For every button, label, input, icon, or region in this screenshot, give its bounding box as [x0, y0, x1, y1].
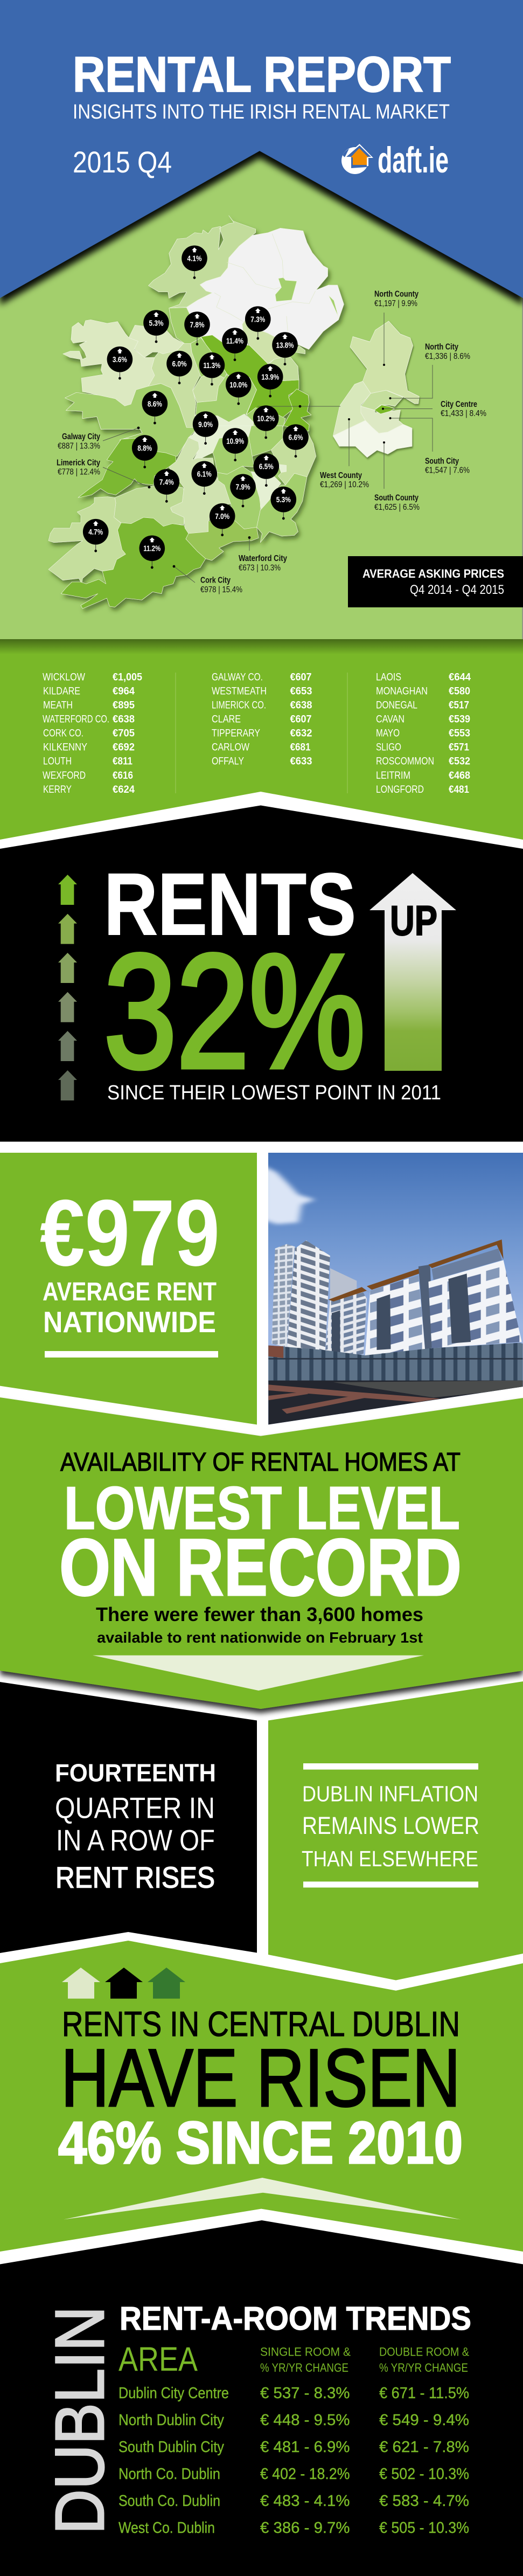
county badge: 10.9% [222, 428, 248, 461]
table column: double room prices [379, 2385, 469, 2537]
county badge: 10.2% [253, 405, 279, 439]
county badge: 13.8%: 13.8% [276, 341, 294, 350]
county names column 1: LOUTH [43, 755, 72, 767]
county names column 2: CLARE [212, 713, 241, 725]
text block: homes available: available to rent nationwide on February 1st [97, 1629, 423, 1646]
panel: blue header [0, 0, 523, 298]
leader lines: dublin inset [257, 313, 433, 489]
map: southern counties [48, 426, 316, 608]
county badge: 7.4%: 7.4% [159, 478, 174, 487]
county prices column 2: €633 [290, 755, 312, 767]
county badge: 7.0% [210, 503, 235, 536]
label: Cork City [173, 565, 242, 594]
county badge: 11.4% [222, 328, 248, 361]
table column: double room prices: € 621 - 7.8% [379, 2439, 469, 2456]
panel: availability [0, 1397, 523, 1709]
callout: average asking prices: AVERAGE ASKING PRICES [362, 567, 504, 580]
panel: central dublin [0, 1941, 523, 2252]
panel: ireland map [48, 216, 344, 608]
text: dublin inflation: REMAINS LOWER [302, 1812, 479, 1839]
county prices column 3: €468 [449, 770, 470, 781]
label: Cork City: Cork City [200, 576, 231, 585]
county names column 1: CORK CO. [43, 727, 83, 739]
label: South City: South City [425, 457, 459, 466]
county names column 2: WESTMEATH [212, 685, 267, 697]
icon: small arrow stack [58, 875, 77, 1100]
county names column 1: WICKLOW [43, 671, 85, 683]
map: northern counties [63, 216, 344, 460]
county badge: 6.6%: 6.6% [289, 433, 303, 442]
table column: areas: North Dublin City [118, 2412, 224, 2429]
county badge: 9.0% [193, 411, 218, 445]
label: Waterford City: €673 | 10.3% [239, 564, 281, 573]
callout: average asking prices [348, 556, 523, 607]
county badge: 6.0%: 6.0% [172, 360, 187, 369]
county badge: 10.2%: 10.2% [257, 414, 275, 423]
county badge: 11.3%: 11.3% [203, 362, 220, 370]
heading: lowest level: LOWEST LEVEL [64, 1474, 460, 1542]
panel: dublin inflation [268, 1681, 523, 1980]
county prices column 1: €705 [113, 727, 135, 739]
county badge: 4.1% [182, 246, 207, 279]
county prices column 2: €632 [290, 727, 312, 739]
county badge: 10.0% [226, 372, 252, 405]
county prices column 1: €692 [113, 741, 135, 753]
table column: areas: Dublin City Centre [118, 2385, 229, 2402]
label: West County: West County [320, 471, 362, 480]
county prices column 3 [449, 671, 471, 795]
county badge: 7.8%: 7.8% [190, 321, 205, 329]
county names column 3: MONAGHAN [376, 685, 428, 697]
county badge: 9.0%: 9.0% [198, 420, 213, 429]
table header: single room: % YR/YR CHANGE [260, 2361, 348, 2374]
county names column 3 [376, 671, 434, 795]
heading: rents: RENTS [104, 855, 356, 953]
label: South County [374, 494, 420, 512]
table header: area: AREA [118, 2340, 198, 2378]
county names column 2: CARLOW [212, 741, 249, 753]
table column: double room prices: € 583 - 4.7% [379, 2492, 469, 2510]
county names column 2 [212, 671, 267, 767]
county names column 3: LEITRIM [376, 770, 410, 781]
county badge: 10.9%: 10.9% [226, 437, 244, 446]
county badge: 4.7% [83, 519, 109, 552]
county badge: 5.3% south [270, 487, 296, 520]
county badge: 13.9% [257, 364, 283, 397]
panel: fourteenth quarter [0, 1682, 257, 1953]
label: Galway City: Galway City [62, 432, 100, 441]
table header: single room: SINGLE ROOM & [260, 2345, 351, 2358]
county badge: 5.3% [143, 310, 169, 343]
panel: county price list [0, 639, 523, 855]
county prices column 3: €481 [449, 784, 469, 795]
county badge: 4.1%: 4.1% [187, 255, 202, 264]
county names column 1: KERRY [43, 784, 72, 795]
text: dublin inflation [302, 1782, 479, 1871]
label: North City: €1,336 | 8.6% [425, 352, 470, 361]
table column: double room prices: € 671 - 11.5% [379, 2385, 469, 2402]
label: South County: South County [374, 494, 419, 502]
county names column 1: KILDARE [43, 685, 80, 697]
county names column 2: OFFALY [212, 755, 244, 767]
text: quarter in: QUARTER IN [55, 1791, 215, 1825]
logo: daft.ie: daft.ie [378, 140, 449, 181]
county badge: 8.8%: 8.8% [137, 444, 152, 453]
county badge: 3.6% [107, 347, 133, 379]
table column: double room prices: € 549 - 9.4% [379, 2412, 469, 2429]
county badge: 3.6%: 3.6% [113, 356, 127, 364]
label: City Centre [441, 400, 486, 418]
county names column 2: TIPPERARY [212, 727, 260, 739]
county prices column 2: €681 [290, 741, 311, 753]
county badge: 11.2%: 11.2% [143, 545, 161, 553]
text: dublin inflation: THAN ELSEWHERE [302, 1846, 478, 1871]
text: rent rises: RENT RISES [55, 1860, 215, 1894]
county badge: 7.3% [245, 306, 271, 340]
table column: double room prices: € 502 - 10.3% [379, 2466, 469, 2483]
county prices column 3: €644 [449, 671, 471, 683]
county badge: 6.5%: 6.5% [259, 462, 274, 471]
county prices column 2: €607 [290, 671, 311, 683]
county badge: 6.5% [253, 453, 279, 487]
table header: double room: DOUBLE ROOM & [379, 2345, 469, 2358]
icon: up arrow: UP [390, 897, 437, 944]
county badge: 6.1% [192, 461, 217, 495]
county badge: 4.7%: 4.7% [88, 528, 103, 537]
caption: SINCE THEIR LOWEST POINT IN 2011 [107, 1082, 441, 1104]
text block: homes available: There were fewer than 3,600 homes [96, 1603, 423, 1625]
county prices column 1: €1,005 [113, 671, 142, 683]
county names column 3: LAOIS [376, 671, 401, 683]
table column: areas: South Dublin City [118, 2439, 224, 2456]
county badge: 6.1%: 6.1% [197, 470, 212, 479]
title: RENTAL REPORT [73, 46, 451, 102]
label: North County [374, 290, 419, 308]
county badge: 8.8% [132, 435, 157, 468]
icon: up arrow [369, 873, 456, 1071]
county prices column 2: €607 [290, 713, 311, 725]
label: Waterford City [239, 536, 287, 573]
label: nationwide: NATIONWIDE [43, 1305, 216, 1339]
table header: double room [379, 2345, 469, 2374]
county badge: 11.4%: 11.4% [226, 337, 243, 345]
label: City Centre: City Centre [441, 400, 477, 409]
county prices column 2: €653 [290, 685, 312, 697]
county names column 1: KILKENNY [43, 741, 87, 753]
label: North County: North County [374, 290, 419, 299]
county badge: 7.9% [230, 474, 256, 507]
county prices column 3: €553 [449, 727, 470, 739]
label: City Centre: €1,433 | 8.4% [441, 409, 486, 418]
label: average rent: AVERAGE RENT [43, 1278, 217, 1306]
subtitle: INSIGHTS INTO THE IRISH RENTAL MARKET [73, 101, 450, 123]
table column: areas: West Co. Dublin [118, 2519, 215, 2537]
icon: pale chevron [64, 2178, 461, 2219]
county prices column 1: €638 [113, 713, 135, 725]
county badge: 7.0%: 7.0% [215, 513, 229, 521]
county badge: 6.0% [166, 351, 192, 384]
county badge: 7.8% [184, 311, 210, 345]
table column: single room prices: € 483 - 4.1% [260, 2492, 350, 2510]
county badge: 7.4% [154, 469, 179, 503]
text: in a row of: IN A ROW OF [56, 1824, 215, 1857]
table header: double room: % YR/YR CHANGE [379, 2361, 468, 2374]
county badge: 13.9%: 13.9% [261, 373, 279, 382]
table column: areas [118, 2385, 229, 2537]
county badge: 11.3% [199, 352, 225, 385]
label: Galway City: €887 | 13.3% [58, 442, 100, 451]
date label: 2015 Q4 [73, 145, 172, 179]
table column: double room prices: € 505 - 10.3% [379, 2519, 469, 2537]
label: South City: €1,547 | 7.6% [425, 466, 470, 475]
county badge: 11.2% [139, 536, 165, 569]
label: North City: North City [425, 343, 458, 352]
right edge line [522, 298, 523, 639]
table column: single room prices: € 537 - 8.3% [260, 2385, 350, 2402]
county prices column 1: €895 [113, 699, 135, 711]
heading: rent-a-room trends: RENT-A-ROOM TRENDS [120, 2300, 471, 2337]
county prices column 3: €532 [449, 755, 470, 767]
county badge: 13.8% [272, 332, 298, 365]
panel: map background [0, 146, 523, 639]
label: Galway City [58, 427, 140, 451]
label: Limerick City: €778 | 12.4% [58, 468, 100, 477]
county badge: 8.6%: 8.6% [148, 400, 162, 408]
county names column 3: ROSCOMMON [376, 755, 434, 767]
label: South County: €1,625 | 6.5% [374, 503, 420, 512]
table column: areas: North Co. Dublin [118, 2466, 220, 2483]
heading: availability: AVAILABILITY OF RENTAL HOMES AT [60, 1448, 461, 1477]
label: North County: €1,197 | 9.9% [374, 299, 417, 308]
county prices column 1: €964 [113, 685, 135, 697]
panel: average rent [0, 1153, 257, 1425]
photo: apartment buildings [263, 1153, 523, 1430]
label: West County: €1,269 | 10.2% [320, 480, 369, 489]
county badge: 5.3% south: 5.3% [276, 496, 291, 504]
county names column 2: GALWAY CO. [212, 671, 263, 683]
text: dublin inflation: DUBLIN INFLATION [302, 1782, 478, 1806]
county prices column 1: €811 [113, 755, 133, 767]
label: Limerick City [57, 458, 150, 488]
big number: 979 euro: €979 [40, 1181, 220, 1286]
table column: single room prices: € 481 - 6.9% [260, 2439, 350, 2456]
panel: rent-a-room trends [0, 2220, 523, 2576]
label: South City [425, 457, 470, 475]
label: North City [425, 343, 470, 361]
county badge: 6.6% [283, 424, 309, 458]
county names column 3: MAYO [376, 727, 400, 739]
table column: single room prices: € 448 - 9.5% [260, 2412, 350, 2429]
county badge: 8.6% [142, 391, 168, 424]
county prices column 3: €571 [449, 741, 469, 753]
logo: daft.ie [341, 140, 449, 181]
text block: homes available [96, 1603, 423, 1646]
county prices column 1: €616 [113, 770, 133, 781]
label: West County [320, 471, 369, 489]
county badge: 10.0%: 10.0% [229, 381, 247, 390]
table column: single room prices [260, 2385, 350, 2537]
county names column 1: WATERFORD CO. [43, 713, 109, 725]
label: fourteenth: FOURTEENTH [55, 1759, 216, 1787]
big number: 32%: 32% [104, 920, 365, 1102]
county names column 1: MEATH [43, 699, 73, 711]
county names column 3: SLIGO [376, 741, 401, 753]
county names column 3: CAVAN [376, 713, 405, 725]
county names column 1 [43, 671, 109, 795]
text: rents in central dublin: RENTS IN CENTRAL DUBLIN [62, 2004, 460, 2044]
table column: areas: South Co. Dublin [118, 2492, 220, 2510]
county names column 1: WEXFORD [43, 770, 86, 781]
label: dublin vertical: DUBLIN [41, 2307, 118, 2534]
table header: single room [260, 2345, 351, 2374]
callout: average asking prices: Q4 2014 - Q4 2015 [410, 583, 504, 597]
heading: 46% since 2010: 46% SINCE 2010 [58, 2110, 463, 2176]
county badge: 7.3%: 7.3% [250, 315, 265, 324]
table column: single room prices: € 402 - 18.2% [260, 2466, 350, 2483]
county names column 3: LONGFORD [376, 784, 424, 795]
county badge: 7.9%: 7.9% [236, 483, 250, 492]
county prices column 1 [113, 671, 142, 795]
county names column 2: LIMERICK CO. [212, 699, 266, 711]
label: Limerick City: Limerick City [57, 458, 100, 467]
panel: rents up [0, 805, 523, 1142]
label: Waterford City: Waterford City [239, 554, 287, 563]
dublin map inset [333, 321, 419, 458]
county prices column 3: €580 [449, 685, 470, 697]
icon: down triangle [93, 1656, 424, 1691]
county prices column 3: €517 [449, 699, 469, 711]
county names column 3: DONEGAL [376, 699, 417, 711]
white chevron band [0, 792, 523, 862]
table column: single room prices: € 386 - 9.7% [260, 2519, 350, 2537]
county prices column 2 [290, 671, 312, 767]
icon: three house arrows [62, 1968, 185, 1999]
county prices column 2: €638 [290, 699, 312, 711]
label: Cork City: €978 | 15.4% [200, 585, 242, 594]
county badge: 5.3%: 5.3% [149, 319, 164, 328]
county prices column 3: €539 [449, 713, 470, 725]
county prices column 1: €624 [113, 784, 135, 795]
